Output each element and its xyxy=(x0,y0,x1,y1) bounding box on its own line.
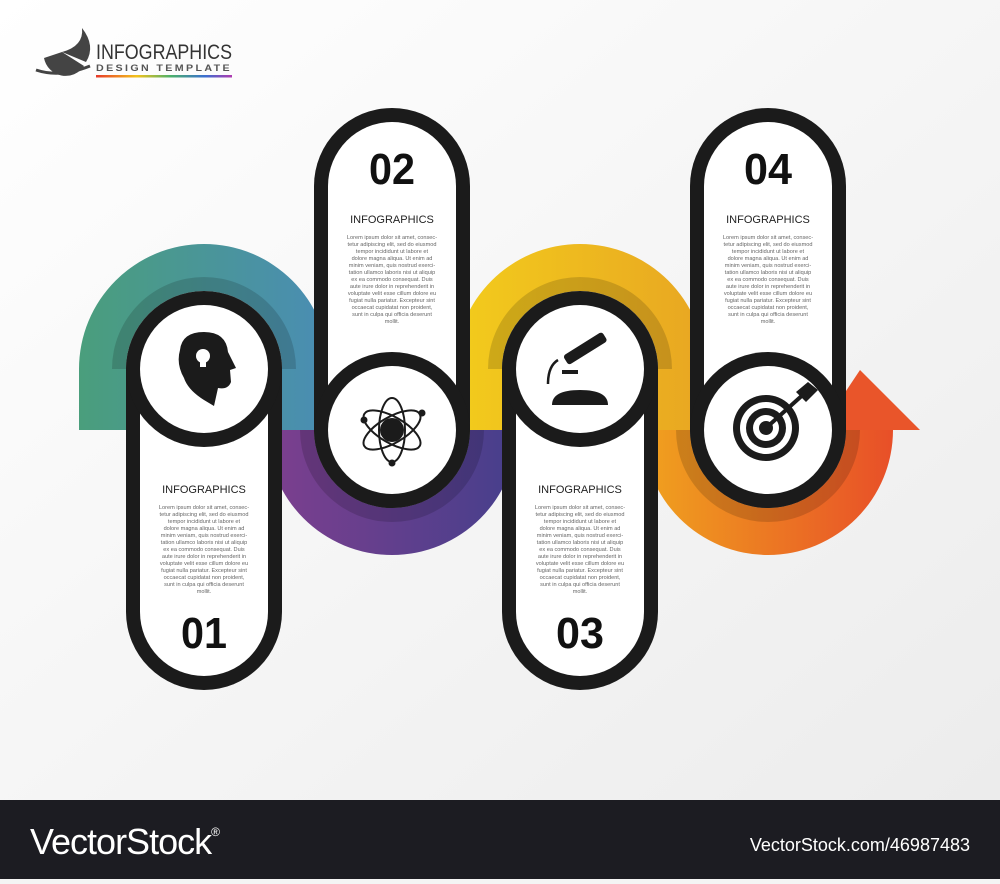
logo xyxy=(36,28,232,78)
panel 01: INFOGRAPHICS xyxy=(162,484,246,496)
panel 01: occaecat cupidatat non proident, xyxy=(164,575,245,581)
panel 02: tation ullamco laboris nisi ut aliquip xyxy=(349,270,435,276)
panel 01: tetur adipiscing elit, sed do eiusmod xyxy=(160,512,248,518)
panel 03: aute irure dolor in reprehenderit in xyxy=(538,554,622,560)
icon: microscope xyxy=(502,291,658,447)
panel 02: fugiat nulla pariatur. Excepteur sint xyxy=(349,298,435,304)
panel 01: Lorem ipsum dolor sit amet, consec- xyxy=(159,505,249,511)
footer bar: VectorStock.com/46987483 xyxy=(750,835,970,855)
panel 04: ex ea commodo consequat. Duis xyxy=(727,277,809,283)
panel 04: occaecat cupidatat non proident, xyxy=(728,305,809,311)
panel 03: voluptate velit esse cillum dolore eu xyxy=(536,561,624,567)
panel 01: tempor incididunt ut labore et xyxy=(168,519,241,525)
panel 04: Lorem ipsum dolor sit amet, consec- xyxy=(723,235,813,241)
panel 03 xyxy=(502,291,658,690)
panel 03: INFOGRAPHICS xyxy=(538,484,622,496)
panel 03: sunt in culpa qui officia deserunt xyxy=(540,582,620,588)
icon: target xyxy=(690,352,846,508)
panel 04: mollit. xyxy=(761,319,776,325)
panel 04: voluptate velit esse cillum dolore eu xyxy=(724,291,812,297)
logo: DESIGN TEMPLATE xyxy=(96,63,232,73)
panel 02: dolore magna aliqua. Ut enim ad xyxy=(352,256,432,262)
panel 03: tetur adipiscing elit, sed do eiusmod xyxy=(536,512,624,518)
panel 04: minim veniam, quis nostrud exerci- xyxy=(725,263,811,269)
logo: INFOGRAPHICS xyxy=(96,41,232,64)
footer bar xyxy=(0,800,1000,879)
panel 01: ex ea commodo consequat. Duis xyxy=(163,547,245,553)
panel 04: tempor incididunt ut labore et xyxy=(732,249,805,255)
icon: atom xyxy=(314,352,470,508)
panel 03: ex ea commodo consequat. Duis xyxy=(539,547,621,553)
panel 02: occaecat cupidatat non proident, xyxy=(352,305,433,311)
panel 04: sunt in culpa qui officia deserunt xyxy=(728,312,808,318)
panel 04: tation ullamco laboris nisi ut aliquip xyxy=(725,270,811,276)
panel 03: fugiat nulla pariatur. Excepteur sint xyxy=(537,568,623,574)
panel 02: sunt in culpa qui officia deserunt xyxy=(352,312,432,318)
icon: head with bulb xyxy=(126,291,282,447)
panel 04: tetur adipiscing elit, sed do eiusmod xyxy=(724,242,812,248)
panel 01: voluptate velit esse cillum dolore eu xyxy=(160,561,248,567)
panel 03: occaecat cupidatat non proident, xyxy=(540,575,621,581)
panel 03: tation ullamco laboris nisi ut aliquip xyxy=(537,540,623,546)
panel 02: voluptate velit esse cillum dolore eu xyxy=(348,291,436,297)
panel 02: tempor incididunt ut labore et xyxy=(356,249,429,255)
panel 02: tetur adipiscing elit, sed do eiusmod xyxy=(348,242,436,248)
panel 01: sunt in culpa qui officia deserunt xyxy=(164,582,244,588)
panel 04: INFOGRAPHICS xyxy=(726,214,810,226)
panel 01: fugiat nulla pariatur. Excepteur sint xyxy=(161,568,247,574)
panel 01: aute irure dolor in reprehenderit in xyxy=(162,554,246,560)
panel 04: fugiat nulla pariatur. Excepteur sint xyxy=(725,298,811,304)
panel 02: ex ea commodo consequat. Duis xyxy=(351,277,433,283)
panel 03: mollit. xyxy=(573,589,588,595)
panel 02 xyxy=(314,108,470,508)
ribbon: wave path xyxy=(79,244,920,555)
arrow head xyxy=(820,370,920,430)
panel 01: tation ullamco laboris nisi ut aliquip xyxy=(161,540,247,546)
panel 03: minim veniam, quis nostrud exerci- xyxy=(537,533,623,539)
footer bar: VectorStock xyxy=(30,821,211,862)
panel 02: Lorem ipsum dolor sit amet, consec- xyxy=(347,235,437,241)
panel 02: 02 xyxy=(369,145,415,194)
panel 01 xyxy=(126,291,282,690)
panel 01: 01 xyxy=(181,609,227,658)
panel 04 xyxy=(690,108,846,508)
panel 03: 03 xyxy=(556,609,604,658)
panel 03: tempor incididunt ut labore et xyxy=(544,519,617,525)
panel 03: dolore magna aliqua. Ut enim ad xyxy=(540,526,620,532)
panel 02: aute irure dolor in reprehenderit in xyxy=(350,284,434,290)
panel 02: INFOGRAPHICS xyxy=(350,214,434,226)
panel 01: mollit. xyxy=(197,589,212,595)
panel 04: 04 xyxy=(744,145,793,194)
panel 02: mollit. xyxy=(385,319,400,325)
footer bar: ® xyxy=(211,825,220,839)
panel 01: minim veniam, quis nostrud exerci- xyxy=(161,533,247,539)
panel 02: minim veniam, quis nostrud exerci- xyxy=(349,263,435,269)
panel 04: aute irure dolor in reprehenderit in xyxy=(726,284,810,290)
panel 01: dolore magna aliqua. Ut enim ad xyxy=(164,526,244,532)
panel 03: Lorem ipsum dolor sit amet, consec- xyxy=(535,505,625,511)
panel 04: dolore magna aliqua. Ut enim ad xyxy=(728,256,808,262)
